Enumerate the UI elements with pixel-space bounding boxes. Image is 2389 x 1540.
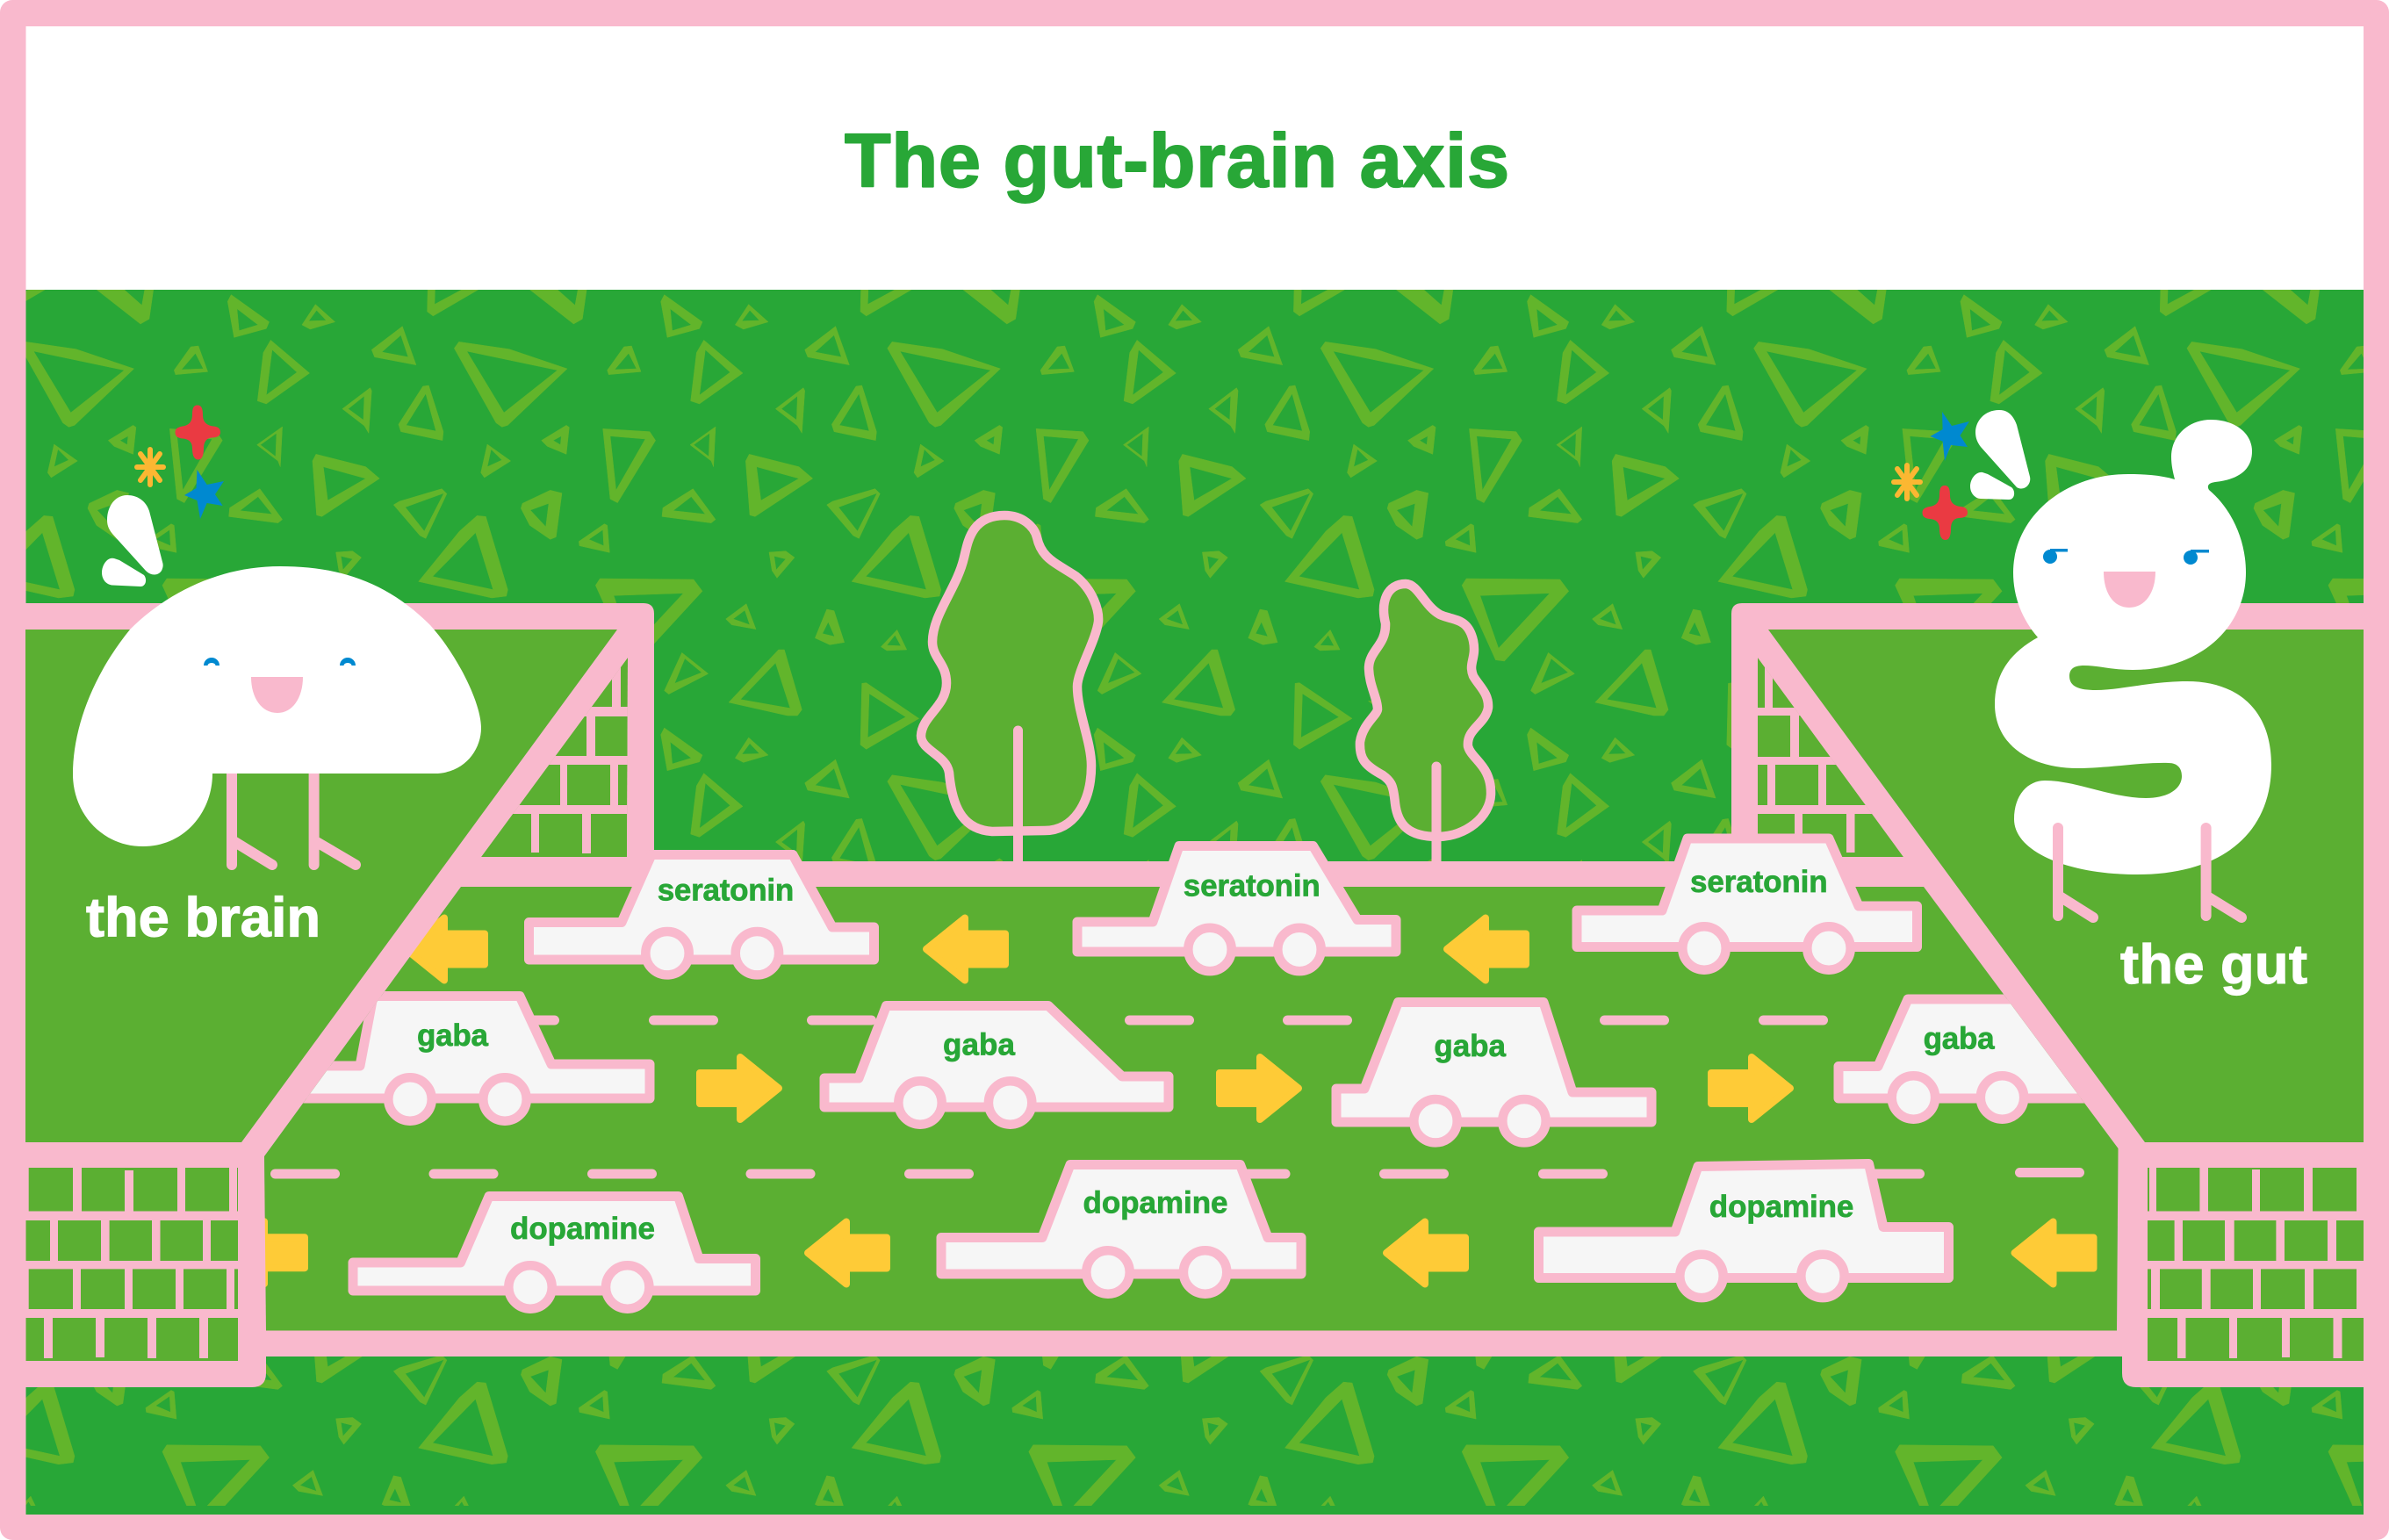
brain exclamation mark: [102, 495, 163, 586]
car: dopamine 1: [353, 1196, 755, 1309]
car: dopamine 3: [1538, 1164, 1949, 1298]
car: gaba 3: [1336, 1003, 1651, 1142]
brain eyes: [204, 658, 356, 666]
arrow: bottom row far left: [226, 1221, 305, 1284]
gut legs: [2058, 828, 2241, 918]
icon: red sparkle left: [176, 406, 220, 460]
arrow: top row far left: [406, 918, 485, 980]
road frame: [25, 603, 2364, 1387]
arrow: bottom row centre-left: [808, 1222, 887, 1284]
character: the gut: [1995, 420, 2271, 918]
title: The gut-brain axis: [845, 119, 1509, 204]
car: dopamine 2: [941, 1164, 1301, 1294]
icon: blue star right: [1930, 412, 1969, 461]
icon: orange asterisk left: [137, 450, 163, 485]
arrow: top row right: [1447, 918, 1526, 980]
road and side plots: [25, 630, 2364, 1331]
gut eyes: [2043, 549, 2209, 565]
car: seratonin 3: seratonin: [1690, 865, 1828, 899]
car: gaba 2: gaba: [943, 1028, 1016, 1062]
car: dopamine 3: dopamine: [1709, 1190, 1853, 1224]
brain mouth: [251, 677, 303, 713]
icon: orange asterisk right: [1894, 465, 1920, 499]
gut mouth: [2104, 572, 2155, 608]
gut exclamation mark: [1970, 410, 2030, 500]
car: gaba 1: [290, 996, 650, 1121]
lane dashes: [270, 1015, 2084, 1178]
arrow: middle row left: [700, 1057, 779, 1119]
brick wall: upper right: [1758, 658, 1907, 857]
arrow: middle row right: [1711, 1057, 1790, 1119]
icon: blue star left: [184, 470, 224, 519]
car: seratonin 3: [1577, 838, 1918, 970]
label: the brain: the brain: [86, 887, 320, 948]
car: seratonin 2: seratonin: [1184, 869, 1320, 903]
car: seratonin 2: [1077, 846, 1396, 971]
brain legs: [232, 768, 356, 865]
brick wall: lower right: [2148, 1168, 2364, 1361]
car: dopamine 1: dopamine: [510, 1212, 655, 1246]
panel: green patterned background: [26, 290, 2364, 1515]
arrow: middle row centre: [1220, 1057, 1299, 1119]
brain body: [73, 566, 481, 846]
arrow: bottom row right: [2014, 1222, 2093, 1284]
tree: small: [1360, 584, 1491, 865]
car: gaba 4: gaba: [1924, 1022, 1995, 1056]
character: the brain: [73, 566, 481, 865]
car: gaba 3: gaba: [1434, 1029, 1507, 1063]
gut body: [1995, 420, 2271, 874]
car: dopamine 2: dopamine: [1083, 1186, 1227, 1220]
brick wall: lower left: [25, 1168, 238, 1361]
arrow: top row left: [926, 918, 1005, 980]
tree: large: [921, 515, 1098, 865]
header panel: [26, 26, 2364, 290]
label: the gut: the gut: [2120, 934, 2307, 996]
car: gaba 2: [824, 1006, 1169, 1125]
car: seratonin 1: seratonin: [658, 874, 794, 908]
icon: red sparkle right: [1923, 486, 1968, 540]
car: gaba 1: gaba: [417, 1018, 489, 1053]
arrow: bottom row centre-right: [1386, 1222, 1465, 1284]
brick wall: upper left: [474, 658, 629, 857]
car: gaba 4: [1839, 999, 2107, 1119]
car: seratonin 1: [529, 855, 874, 975]
